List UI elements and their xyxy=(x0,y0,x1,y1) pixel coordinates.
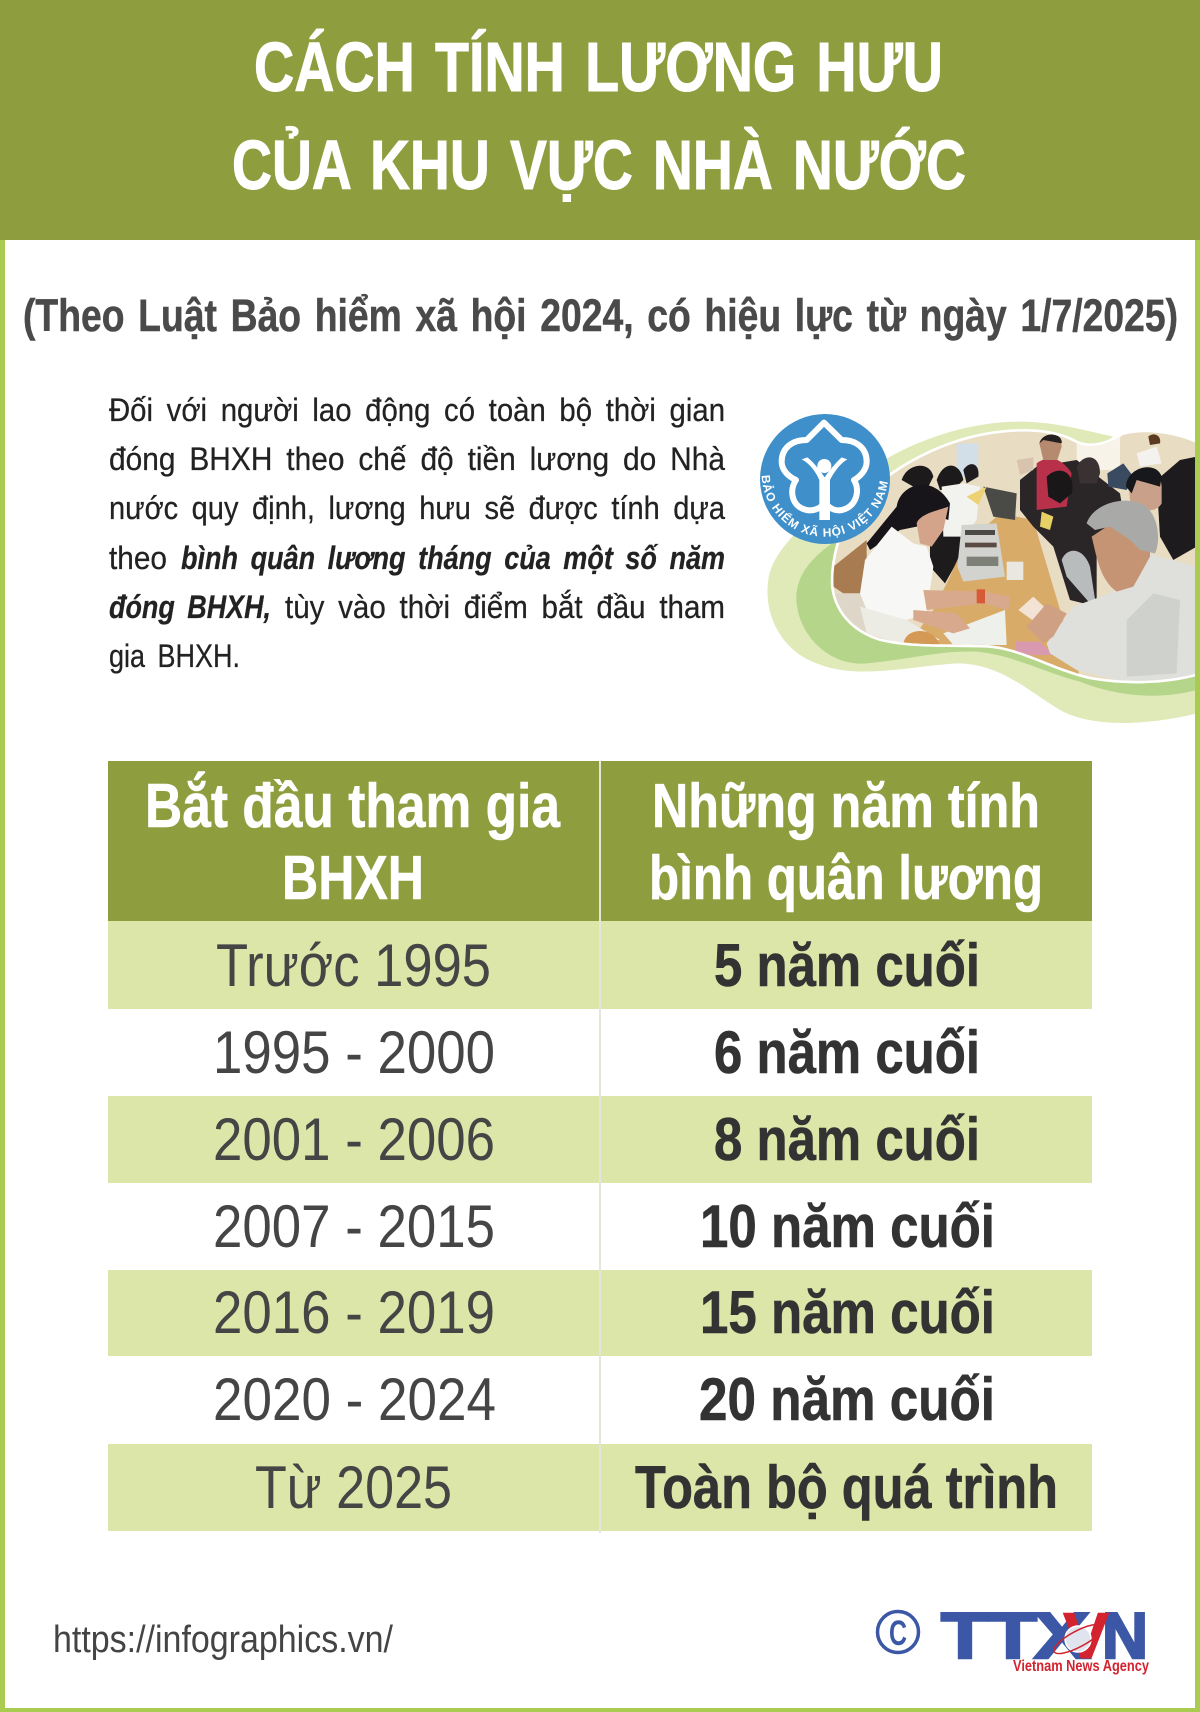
wood panel xyxy=(833,540,867,593)
row: 2020 - 2024: 20 năm cuối xyxy=(699,1366,995,1433)
row: 1995 - 2000 xyxy=(213,1019,980,1086)
intro text block: theo xyxy=(109,540,167,576)
mid green wave xyxy=(796,537,1197,696)
logo ring text: BẢO HIỂM XÃ HỘI VIỆT NAM xyxy=(762,475,888,538)
table header: Những năm tính xyxy=(652,772,1040,841)
row: 2016 - 2019 xyxy=(108,1270,1092,1356)
back clerks xyxy=(902,466,934,486)
copyright mark xyxy=(878,1612,918,1653)
table xyxy=(108,761,1092,1533)
row: Từ 2025 xyxy=(108,1444,1092,1531)
intro text block xyxy=(109,392,725,674)
chair xyxy=(1062,550,1095,602)
row: 2020 - 2024: 2020 - 2024 xyxy=(213,1366,496,1433)
row: 2016 - 2019: 2016 - 2019 xyxy=(213,1279,495,1346)
column divider xyxy=(599,761,601,1533)
intro text block: nước quy định, lương hưu sẽ được tính dựa xyxy=(109,490,725,526)
agency tagline: Vietnam News Agency xyxy=(1013,1658,1149,1675)
table xyxy=(907,513,1080,677)
illustration: social insurance office photo with logo xyxy=(760,414,1195,723)
man with glasses xyxy=(1129,480,1162,510)
logo: Bảo hiểm xã hội Việt Nam xyxy=(760,414,890,544)
row: Trước 1995: 5 năm cuối xyxy=(714,932,980,999)
copyright mark: C xyxy=(889,1614,907,1653)
row: Từ 2025: Toàn bộ quá trình xyxy=(635,1454,1058,1521)
row: 2016 - 2019: 15 năm cuối xyxy=(700,1279,995,1346)
table header: Bắt đầu tham gia xyxy=(145,772,560,841)
clerk in white shirt xyxy=(867,485,950,550)
notepapers xyxy=(943,610,1007,645)
right background people xyxy=(1137,447,1162,467)
right frame edge xyxy=(1195,240,1200,1712)
source url: https://infographics.vn/ xyxy=(53,1619,393,1661)
intro text block: bình quân lương tháng của một số năm xyxy=(181,540,725,576)
green wave background xyxy=(767,422,1197,723)
intro text block: tùy vào thời điểm bắt đầu tham xyxy=(285,589,725,625)
old man xyxy=(1047,553,1197,682)
dark crowd xyxy=(1020,460,1127,607)
intro text block: gia BHXH. xyxy=(109,638,240,674)
flower emblem xyxy=(782,423,867,510)
row: Từ 2025: Từ 2025 xyxy=(255,1454,452,1521)
table header: BHXH xyxy=(282,844,424,913)
table header: bình quân lương xyxy=(649,844,1043,913)
intro text block: đóng BHXH, xyxy=(109,589,271,625)
row: 2001 - 2006 xyxy=(108,1096,1092,1183)
agency wordmark: V xyxy=(1063,1599,1109,1672)
TTXVN logo xyxy=(878,1599,1149,1675)
money counter xyxy=(957,523,1005,582)
row: 2007 - 2015 xyxy=(213,1193,995,1260)
figure xyxy=(817,459,831,473)
row: 2020 - 2024 xyxy=(213,1366,995,1433)
agency wordmark: N xyxy=(1102,1599,1148,1672)
photo xyxy=(827,423,1200,690)
intro text block: đóng BHXH theo chế độ tiền lương do Nhà xyxy=(109,441,725,477)
title banner xyxy=(0,0,1200,240)
row: 2007 - 2015: 10 năm cuối xyxy=(700,1193,995,1260)
agency wordmark: TT xyxy=(941,1599,1037,1672)
row: 1995 - 2000: 6 năm cuối xyxy=(714,1019,980,1086)
agency wordmark xyxy=(941,1599,1148,1672)
row: 2001 - 2006: 2001 - 2006 xyxy=(213,1106,495,1173)
row: 2001 - 2006: 8 năm cuối xyxy=(714,1106,980,1173)
row: 1995 - 2000: 1995 - 2000 xyxy=(213,1019,495,1086)
white outline xyxy=(833,432,1197,681)
row: 2007 - 2015: 2007 - 2015 xyxy=(213,1193,495,1260)
row: Trước 1995: Trước 1995 xyxy=(216,932,491,999)
intro text block: Đối với người lao động có toàn bộ thời gian xyxy=(109,392,725,428)
dark lap behind table xyxy=(930,530,960,584)
title banner: CỦA KHU VỰC NHÀ NƯỚC xyxy=(232,125,966,204)
title banner: CÁCH TÍNH LƯƠNG HƯU xyxy=(254,28,943,106)
row: Trước 1995 xyxy=(108,921,1092,1009)
agency wordmark: X xyxy=(1034,1599,1090,1672)
table header xyxy=(108,761,1092,921)
